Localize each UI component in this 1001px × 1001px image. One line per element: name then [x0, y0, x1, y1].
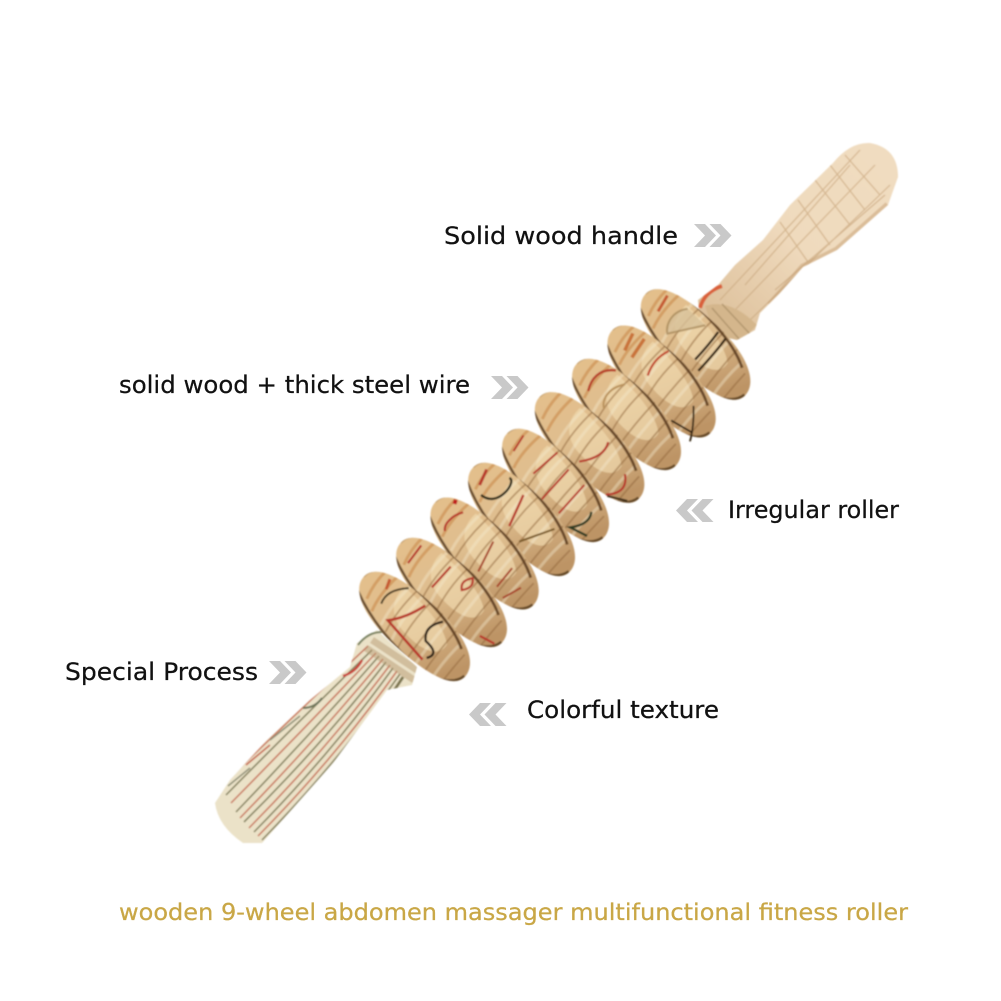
top solid wood handle	[698, 143, 898, 345]
wheel 7	[412, 484, 556, 625]
infographic canvas	[66, 142, 908, 926]
wheel 4	[516, 378, 661, 519]
label: colorful texture: Colorful texture	[527, 696, 719, 724]
arrow: special process	[269, 661, 306, 684]
label: solid wood handle: Solid wood handle	[444, 222, 678, 250]
wheel 3	[553, 345, 698, 486]
arrow: colorful texture	[469, 703, 506, 726]
label: special process: Special Process	[65, 658, 258, 686]
arrow: solid wood + thick steel wire	[491, 376, 528, 399]
wheel 8	[378, 524, 523, 663]
wheel 9	[341, 558, 486, 697]
wheel 2	[589, 312, 733, 453]
wheel 1	[622, 275, 767, 416]
caption title: wooden 9-wheel abdomen massager multifunctional fitness roller	[119, 900, 909, 926]
wheel 6	[449, 449, 592, 592]
roller wheels	[341, 275, 767, 697]
massager roller product	[215, 143, 898, 843]
bottom patterned handle	[215, 630, 420, 843]
arrow: irregular roller	[676, 499, 714, 522]
arrow: solid wood handle	[694, 224, 732, 247]
label: solid wood + thick steel wire: solid wood + thick steel wire	[119, 371, 470, 399]
label: irregular roller: Irregular roller	[728, 496, 899, 524]
wheel 5	[483, 415, 626, 558]
